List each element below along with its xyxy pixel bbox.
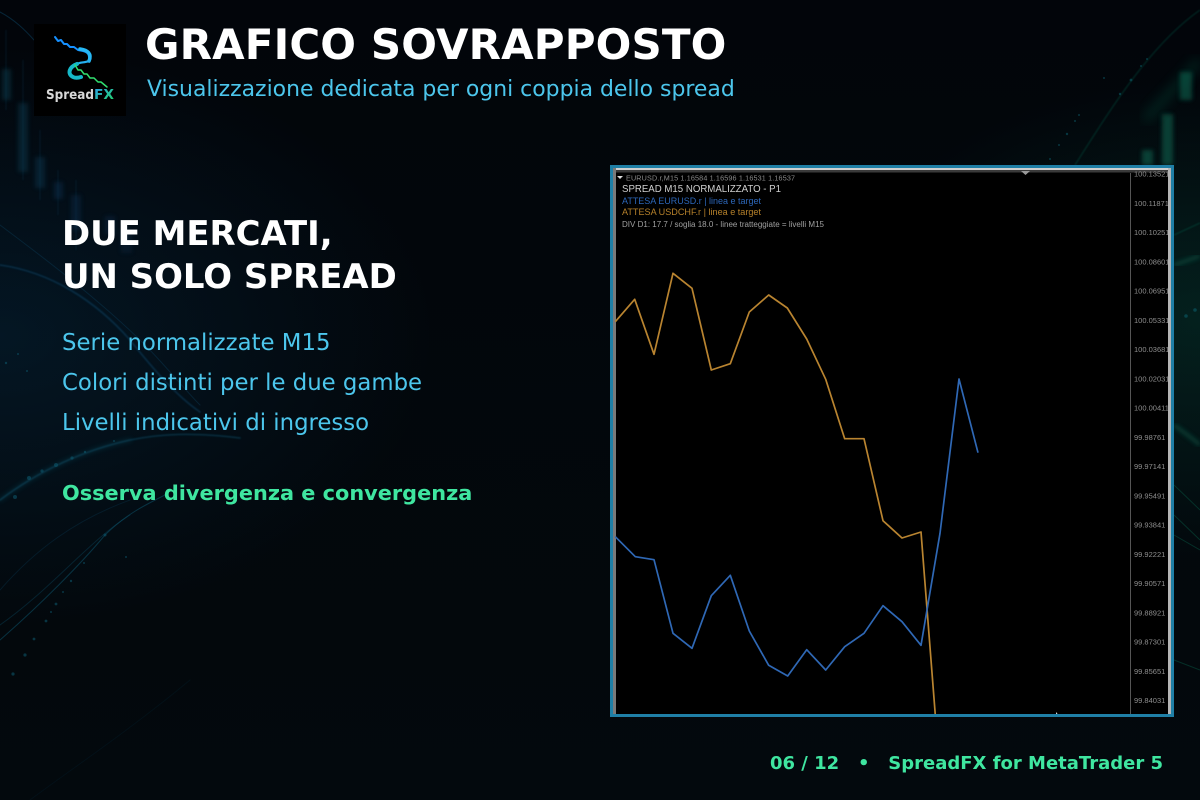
price axis labels: 99.95491 (1134, 491, 1165, 500)
price axis labels: 99.98761 (1134, 433, 1165, 442)
bullet: livelli indicativi: Livelli indicativi di ingresso (62, 410, 369, 436)
panel: chart screenshot (610, 165, 1174, 717)
price axis labels: 99.90571 (1134, 579, 1165, 588)
heading: due mercati: UN SOLO SPREAD (62, 257, 397, 296)
price axis labels: 100.10251 (1134, 228, 1169, 237)
line series: EURUSD blue (615, 379, 978, 676)
chart legend text (617, 174, 825, 229)
price axis labels: 100.05331 (1134, 316, 1169, 325)
price axis labels: 100.03681 (1134, 345, 1169, 354)
price axis labels: 100.08601 (1134, 257, 1169, 266)
chart legend text: ATTESA USDCHF.r | linea e target (622, 207, 762, 217)
price axis labels: 99.87301 (1134, 638, 1165, 646)
price axis labels: 100.11871 (1134, 199, 1169, 208)
price axis labels: 99.85651 (1134, 667, 1165, 676)
heading: due mercati (62, 214, 397, 296)
logo wordmark: Spread (46, 87, 94, 103)
bullet: serie normalizzate: Serie normalizzate M15 (62, 330, 330, 356)
icon: blue and green spread wave (55, 37, 107, 87)
heading: due mercati: DUE MERCATI, (62, 214, 333, 253)
price axis labels: 100.02031 (1134, 374, 1169, 383)
footer: page number and product: 06 / 12 • SpreadFX for MetaTrader 5 (770, 753, 1163, 774)
price axis labels: 100.00411 (1134, 404, 1169, 412)
chart legend text: SPREAD M15 NORMALIZZATO - P1 (622, 184, 781, 195)
price axis labels: 99.84031 (1134, 696, 1165, 705)
line series: USDCHF orange (615, 273, 935, 715)
chart legend text: DIV D1: 17.7 / soglia 18.0 - linee tratteggiate = livelli M15 (622, 220, 825, 229)
logo: SpreadFX (34, 24, 126, 116)
price axis labels: 99.92221 (1134, 550, 1165, 559)
price axis labels: 99.88921 (1134, 608, 1165, 617)
callout: divergenza e convergenza: Osserva divergenza e convergenza (62, 481, 472, 505)
chart legend text: EURUSD.r,M15 1.16584 1.16596 1.16531 1.16537 (626, 174, 795, 182)
chart legend text: ATTESA EURUSD.r | linea e target (622, 196, 762, 206)
price axis labels: 100.06951 (1134, 286, 1169, 296)
price axis labels: 99.93841 (1134, 520, 1165, 530)
subtitle: Visualizzazione dedicata per ogni coppia dello spread (147, 77, 735, 102)
price axis labels: 99.97141 (1134, 462, 1165, 471)
logo wordmark: FX (94, 87, 115, 103)
title: GRAFICO SOVRAPPOSTO (145, 20, 726, 69)
bullet: colori distinti: Colori distinti per le due gambe (62, 370, 422, 396)
price axis labels: 100.13521 (1134, 170, 1169, 178)
price axis labels (1134, 170, 1169, 705)
